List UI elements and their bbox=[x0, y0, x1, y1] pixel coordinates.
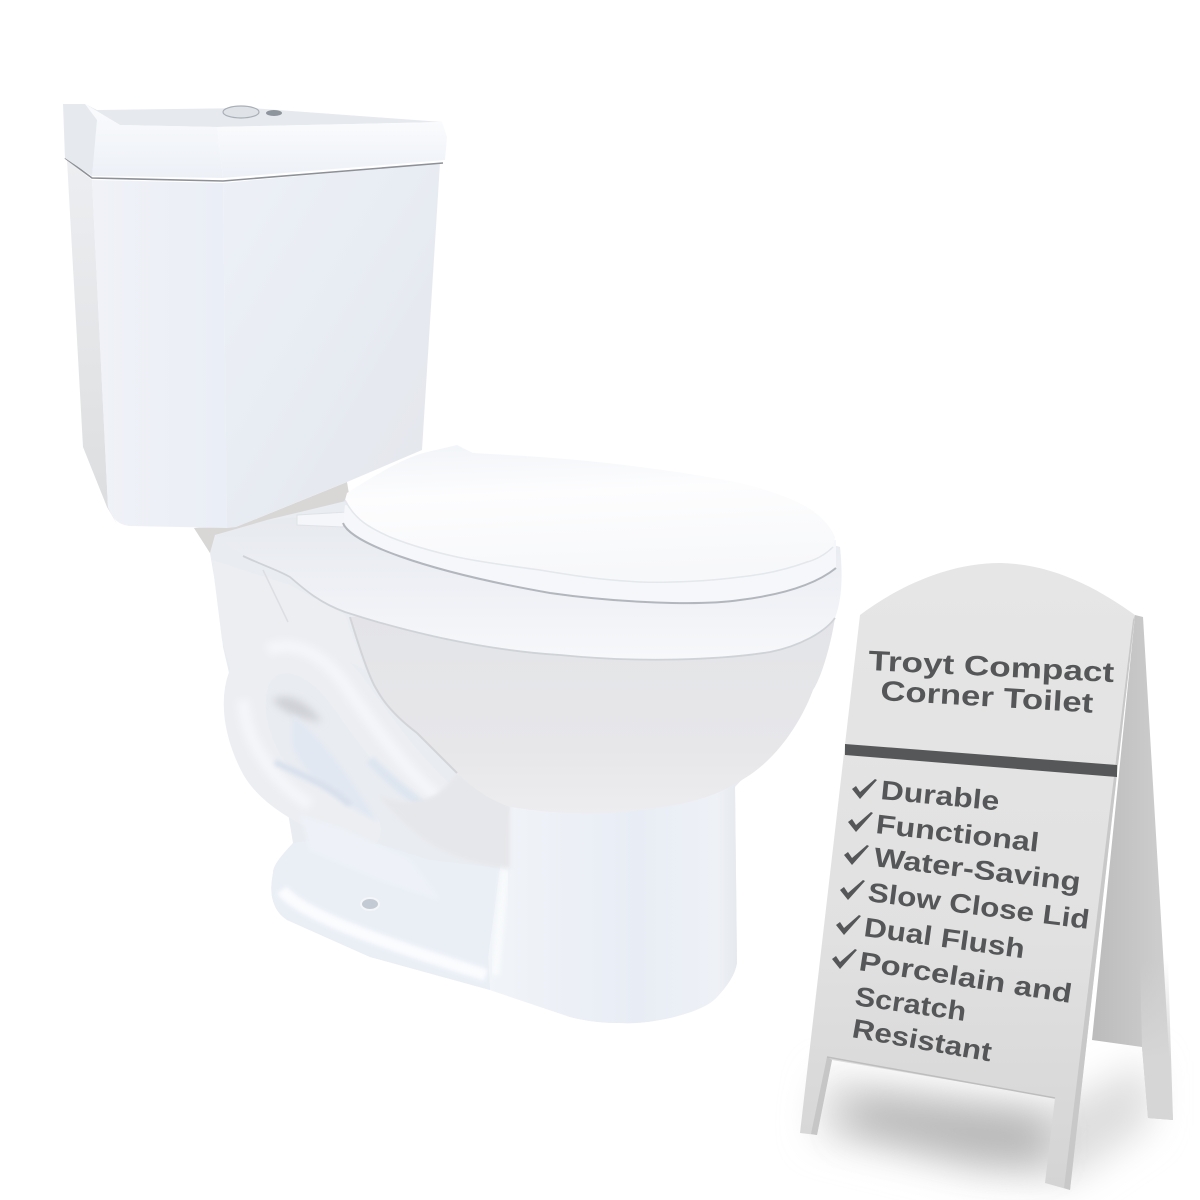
tank connector bbox=[194, 482, 350, 553]
lid top bbox=[85, 104, 442, 127]
foot plate bbox=[271, 835, 500, 990]
check mark: slow close bbox=[840, 880, 865, 900]
rear seam bbox=[263, 570, 288, 622]
divider bar bbox=[845, 744, 1117, 777]
pedestal bbox=[488, 785, 737, 1023]
lid corner bbox=[63, 104, 97, 176]
lid edge bbox=[345, 500, 833, 582]
flush button bbox=[223, 106, 282, 118]
back panel bbox=[1092, 615, 1173, 1120]
front panel bbox=[800, 563, 1135, 1190]
tank left side bbox=[67, 160, 117, 524]
sign title: Corner Toilet bbox=[880, 675, 1094, 719]
bowl left seam bbox=[350, 617, 457, 773]
trapway curve bbox=[243, 646, 510, 900]
lid band left bbox=[63, 104, 223, 178]
front right leg strip bbox=[1064, 615, 1135, 1190]
tank left facet bbox=[92, 180, 227, 528]
tank bbox=[63, 104, 447, 528]
lid band right bbox=[217, 122, 447, 178]
porcelain and scratch resistant: Porcelain and bbox=[857, 946, 1074, 1009]
rim bbox=[215, 513, 842, 660]
lid seam bbox=[65, 158, 443, 181]
front left leg strip bbox=[811, 1057, 832, 1135]
seat gap shadow bbox=[343, 523, 836, 603]
crossbar edge bbox=[827, 1057, 1055, 1098]
A-frame sign bbox=[800, 563, 1173, 1190]
pedestal seam bbox=[495, 870, 505, 975]
sign title bbox=[868, 645, 1115, 719]
toilet bowl and base bbox=[194, 470, 842, 1023]
check mark: durable bbox=[852, 779, 877, 799]
porcelain and scratch resistant bbox=[850, 946, 1074, 1067]
functional: Functional bbox=[874, 809, 1041, 858]
porcelain and scratch resistant: Resistant bbox=[850, 1013, 994, 1067]
toilet illustration bbox=[63, 104, 842, 1023]
bowl bbox=[350, 600, 835, 813]
hinge block bbox=[297, 512, 347, 527]
tank right facet bbox=[223, 163, 440, 528]
sign title: Troyt Compact bbox=[868, 645, 1115, 688]
seat ring bbox=[343, 505, 836, 603]
check mark: water saving bbox=[844, 845, 869, 865]
rear body shade bbox=[212, 560, 365, 675]
base silhouette bbox=[194, 470, 840, 1023]
feature list bbox=[832, 775, 1091, 1067]
sign ground shadow bbox=[815, 1060, 1150, 1180]
slow close lid: Slow Close Lid bbox=[866, 877, 1091, 935]
porcelain and scratch resistant: Scratch bbox=[853, 981, 968, 1027]
back leg bbox=[1140, 960, 1173, 1120]
durable: Durable bbox=[879, 775, 1001, 816]
check mark: dual flush bbox=[836, 915, 861, 935]
foot plate lip bbox=[282, 890, 486, 975]
water saving: Water-Saving bbox=[872, 842, 1082, 897]
check mark: functional bbox=[848, 812, 873, 832]
toilet lid bbox=[345, 445, 835, 582]
dual flush: Dual Flush bbox=[862, 912, 1027, 964]
check mark: porcelain bbox=[832, 949, 857, 969]
bolt cap bbox=[361, 898, 379, 910]
rim shadow line bbox=[243, 556, 835, 660]
